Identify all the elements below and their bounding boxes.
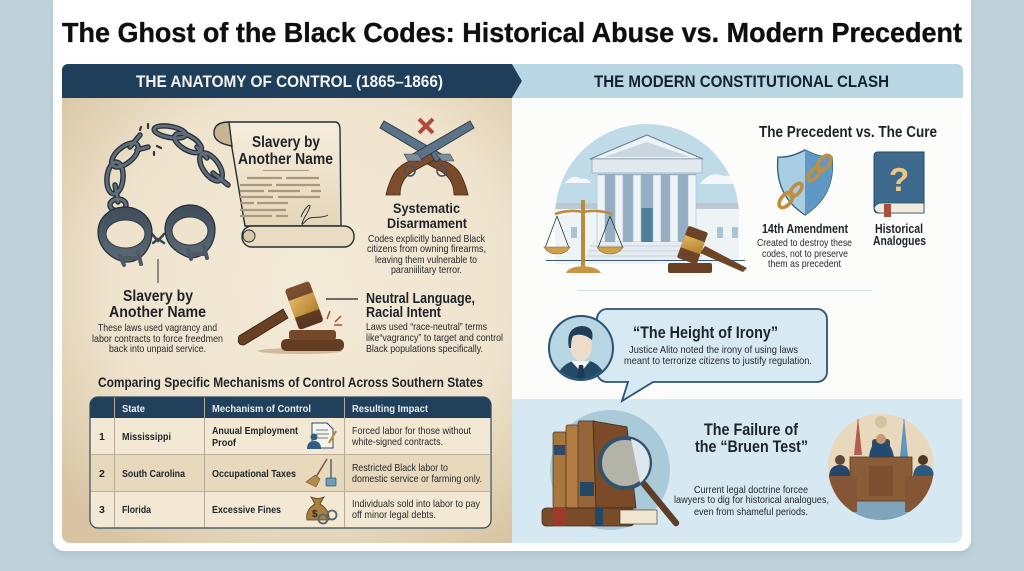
text: slavery by another name: back into unpaid service. <box>109 343 206 355</box>
text: failure of the bruen test <box>674 420 829 518</box>
text: systematic disarmament: Disarmament <box>387 215 467 231</box>
text: slavery by another name: These laws used vagrancy and <box>98 322 217 334</box>
text: neutral language: Racial Intent <box>366 305 441 321</box>
text: historical analogues <box>873 221 926 248</box>
callout: the height of irony <box>549 309 827 401</box>
row: South Carolina: Restricted Black labor to <box>352 462 448 474</box>
row: Florida: Individuals sold into labor to pay <box>352 498 481 510</box>
text: slavery by another name: labor contracts to force freedmen <box>92 333 223 345</box>
text: slavery by another name: Another Name <box>109 304 206 321</box>
row: Florida: 3 <box>99 504 105 516</box>
text: neutral language <box>366 291 503 355</box>
row: Florida: off minor legal debts. <box>352 509 436 521</box>
left header banner: THE ANATOMY OF CONTROL (1865–1866) <box>136 72 443 91</box>
row: South Carolina: South Carolina <box>122 468 185 480</box>
pistol pointing up-right <box>386 121 474 195</box>
icon: shield with broken chain <box>776 150 834 215</box>
left shackle <box>98 207 152 262</box>
text: systematic disarmament: Systematic <box>393 200 460 216</box>
callout text: Justice Alito noted the irony of using laws <box>629 344 798 356</box>
connecting link <box>152 234 164 243</box>
panel: the modern constitutional clash <box>512 64 963 543</box>
text: slavery by another name: Slavery by <box>123 288 193 305</box>
row: Mississippi <box>99 425 471 449</box>
icon: employment document <box>307 423 336 449</box>
text: failure of the bruen test: lawyers to dig for historical analogues, <box>674 494 829 506</box>
row: Florida <box>99 498 481 521</box>
row: South Carolina <box>99 462 482 485</box>
icon: crossed pistols with red X <box>380 119 474 195</box>
table: mechanisms of control <box>90 397 491 528</box>
row: Mississippi: Anuual Employment <box>212 425 298 437</box>
connector: gavel to caption <box>326 298 358 300</box>
text: neutral language: like“vagrancy” to target and control <box>366 332 503 344</box>
heading: the precedent vs the cure: The Precedent vs. The Cure <box>759 124 937 141</box>
scales of justice <box>544 200 623 273</box>
icon: money bag and shackles: $ <box>312 509 318 520</box>
portrait: justice alito <box>549 316 613 382</box>
scroll title <box>238 134 333 168</box>
text: historical analogues: Analogues <box>873 233 926 248</box>
scroll title: Slavery by <box>252 134 320 151</box>
right header banner <box>512 64 963 98</box>
text: failure of the bruen test: the “Bruen Test” <box>695 437 808 456</box>
text: 14th amendment: Created to destroy these <box>757 237 852 249</box>
icon: money bag and shackles <box>307 497 336 524</box>
callout text: meant to terrorize citizens to justify regulation. <box>624 355 812 367</box>
text: systematic disarmament: Codes explicitly banned Black <box>368 233 486 245</box>
table header labels: Resulting Impact <box>352 403 428 415</box>
row: Florida: Excessive Fines <box>212 504 281 516</box>
text: failure of the bruen test: Current legal doctrine forcee <box>694 484 808 496</box>
text: systematic disarmament: leaving them vulnerable to <box>375 254 477 266</box>
row: Mississippi: 1 <box>99 431 105 443</box>
icon: books and magnifying glass <box>542 410 676 530</box>
text: failure of the bruen test: The Failure of <box>704 420 798 439</box>
text: neutral language: Neutral Language, <box>366 291 475 307</box>
title: The Ghost of the Black Codes: Historical Abuse vs. Modern Precedent <box>62 17 962 48</box>
text: systematic disarmament <box>367 200 486 276</box>
text: slavery by another name <box>92 288 223 355</box>
right header banner: THE MODERN CONSTITUTIONAL CLASH <box>594 72 889 91</box>
text: 14th amendment: them as precedent <box>768 258 841 270</box>
text: failure of the bruen test: even from shameful periods. <box>694 506 808 518</box>
callout text: “The Height of Irony” <box>633 323 778 342</box>
text: 14th amendment <box>757 221 852 270</box>
illustration: supreme court with scales and gavel <box>544 124 747 273</box>
text: systematic disarmament: paraniilitary terror. <box>391 264 462 276</box>
row: South Carolina: Occupational Taxes <box>212 468 296 480</box>
panel: failure of the bruen test <box>512 399 962 543</box>
icon: question mark book: ? <box>889 161 909 198</box>
row: South Carolina: domestic service or farming only. <box>352 473 482 485</box>
connector: shackles to caption <box>157 259 159 283</box>
left header banner <box>62 64 522 98</box>
right shackle <box>165 205 215 258</box>
text: 14th amendment: codes, not to preserve <box>762 248 848 260</box>
panel: the anatomy of control <box>62 64 522 543</box>
icon: legal scroll <box>214 122 354 247</box>
row: Mississippi: Mississippi <box>122 431 171 443</box>
icon: question mark book <box>874 152 924 217</box>
chain links <box>106 124 228 211</box>
text: historical analogues: Historical <box>875 221 923 236</box>
table header labels: Mechanism of Control <box>212 403 311 415</box>
row: Mississippi: Proof <box>212 437 236 449</box>
text: systematic disarmament: citizens from owning firearms, <box>367 243 486 255</box>
text: neutral language: Laws used “race-neutral” terms <box>366 321 487 333</box>
text: neutral language: Black populations specifically. <box>366 343 483 355</box>
icon: gavel <box>238 281 344 354</box>
table header labels <box>122 403 428 415</box>
row: Florida: Florida <box>122 504 151 516</box>
scroll title: Another Name <box>238 151 333 168</box>
courthouse columns <box>597 175 696 242</box>
pistol pointing up-left <box>380 121 468 195</box>
icon: courtroom <box>828 414 934 520</box>
icon: broom and dustpan <box>306 459 336 487</box>
icon: broken chain and shackles <box>98 124 228 265</box>
callout text <box>624 323 812 367</box>
text: 14th amendment: 14th Amendment <box>762 221 849 236</box>
courthouse gavel <box>668 226 747 273</box>
table header labels: State <box>122 403 145 415</box>
row: Mississippi: Forced labor for those without <box>352 425 471 437</box>
row: South Carolina: 2 <box>99 468 105 480</box>
table heading: Comparing Specific Mechanisms of Control Across Southern States <box>98 375 483 390</box>
row: Mississippi: white-signed contracts. <box>351 436 443 448</box>
